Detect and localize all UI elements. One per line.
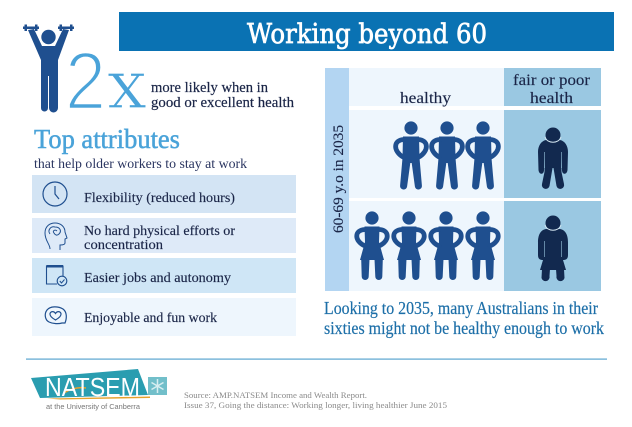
- source note: Source: AMP.NATSEM Income and Wealth Report.: [184, 390, 367, 400]
- heading: top attributes: that help older workers to stay at work: [34, 157, 247, 172]
- attribute: no hard efforts: concentration: [84, 238, 163, 253]
- column heading: fair or poor health: health: [530, 90, 573, 107]
- axis label: age band: 60-69 y.o in 2035: [331, 125, 347, 233]
- attribute: easier jobs: [32, 258, 296, 293]
- column heading: fair or poor health: fair or poor: [513, 72, 591, 89]
- big statistic: 2x: 2: [65, 36, 106, 127]
- title banner: Working beyond 60: [247, 19, 487, 50]
- icons: three healthy men: [396, 121, 498, 190]
- conclusion text: [324, 298, 604, 338]
- source note: [184, 390, 447, 410]
- statistic caption: more likely when in: [151, 80, 268, 96]
- column heading: fair or poor health: [513, 72, 591, 107]
- heading: top attributes: [34, 124, 247, 172]
- title banner: [119, 12, 614, 51]
- axis label: age band: [325, 68, 349, 291]
- panel: attributes list: [32, 175, 296, 336]
- column heading: healthy: healthy: [400, 90, 451, 107]
- attribute: no hard efforts: No hard physical efforts or: [84, 224, 235, 239]
- icon: unwell man: [538, 128, 568, 189]
- source note: Issue 37, Going the distance: Working longer, living healthier June 2015: [184, 400, 447, 410]
- big statistic: 2x: [65, 36, 147, 127]
- attribute: flexibility: Flexibility (reduced hours): [84, 191, 235, 206]
- attribute: no hard efforts: [32, 218, 296, 253]
- attribute: enjoyable work: [32, 298, 296, 336]
- icon: man lifting dumbbells: [23, 24, 74, 112]
- logo: NATSEM: NATSEM: [45, 372, 140, 402]
- attribute: enjoyable work: Enjoyable and fun work: [84, 311, 217, 326]
- conclusion text: Looking to 2035, many Australians in their: [324, 298, 598, 318]
- attribute: easier jobs: Easier jobs and autonomy: [84, 271, 231, 286]
- conclusion text: sixties might not be healthy enough to work: [324, 318, 604, 338]
- logo: NATSEM: [31, 369, 167, 411]
- attribute: flexibility: [32, 175, 296, 213]
- heading: top attributes: Top attributes: [34, 124, 180, 154]
- icon: unwell woman: [538, 216, 568, 281]
- statistic caption: good or excellent health: [151, 95, 294, 111]
- icons: four healthy women: [357, 211, 498, 280]
- logo: NATSEM: at the University of Canberra: [46, 402, 141, 411]
- statistic caption: [151, 80, 294, 111]
- big statistic: 2x: x: [107, 46, 147, 124]
- panel: health table: [325, 68, 601, 291]
